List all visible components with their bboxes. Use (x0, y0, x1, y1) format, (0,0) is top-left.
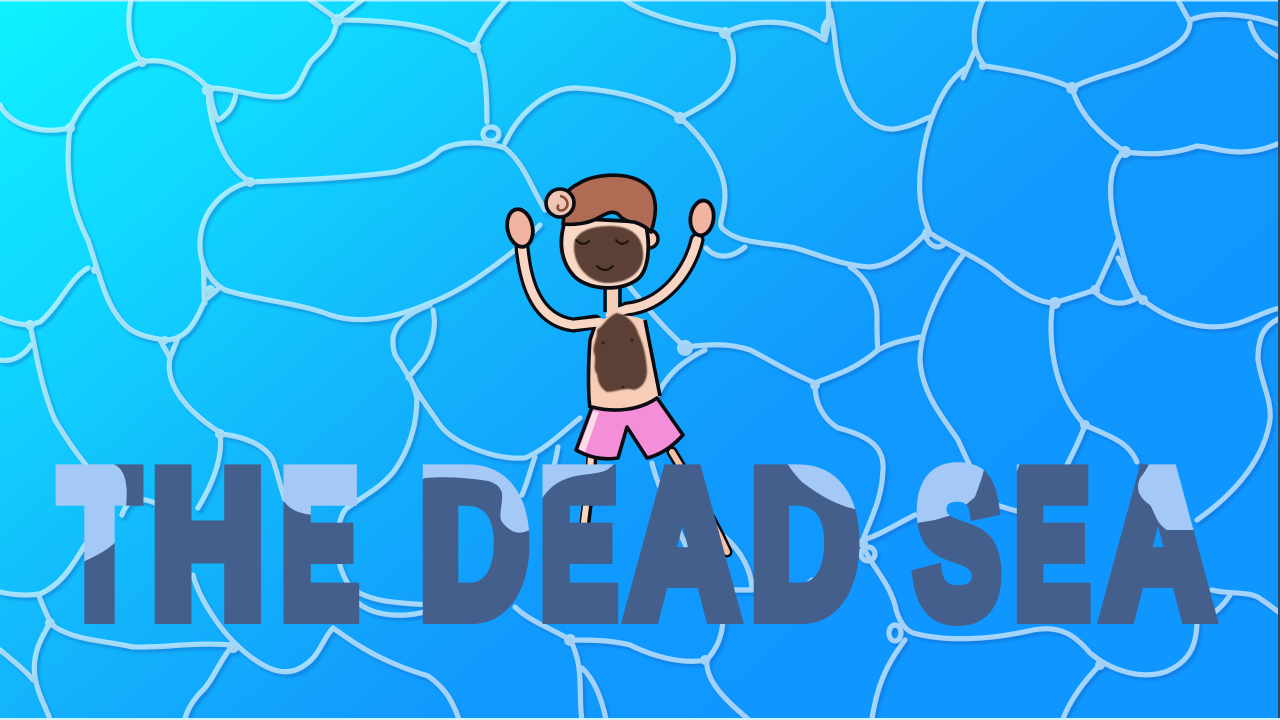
hands (504, 199, 716, 249)
arms and torso (522, 240, 697, 410)
title: THE DEAD SEA: D (420, 430, 529, 659)
title: THE DEAD SEA: A (1103, 430, 1213, 659)
head (561, 218, 648, 288)
title: THE DEAD SEA: H (151, 430, 264, 659)
title: THE DEAD SEA: T (60, 430, 139, 659)
chest mud (594, 313, 647, 392)
title: THE DEAD SEA: E (281, 430, 358, 659)
swim shorts (576, 398, 683, 459)
character: floating boy (504, 175, 727, 552)
chest details (601, 338, 634, 388)
title: THE DEAD SEA: E (540, 430, 618, 659)
face mud (574, 226, 643, 283)
title: THE DEAD SEA: D (750, 430, 859, 659)
legs (583, 452, 727, 552)
hair (546, 175, 655, 232)
title: THE DEAD SEA: S (915, 430, 1001, 659)
title: THE DEAD SEA: A (627, 430, 738, 659)
title: THE DEAD SEA: E (1014, 430, 1090, 659)
ear (640, 230, 658, 248)
closed eyes and smile (576, 240, 628, 270)
